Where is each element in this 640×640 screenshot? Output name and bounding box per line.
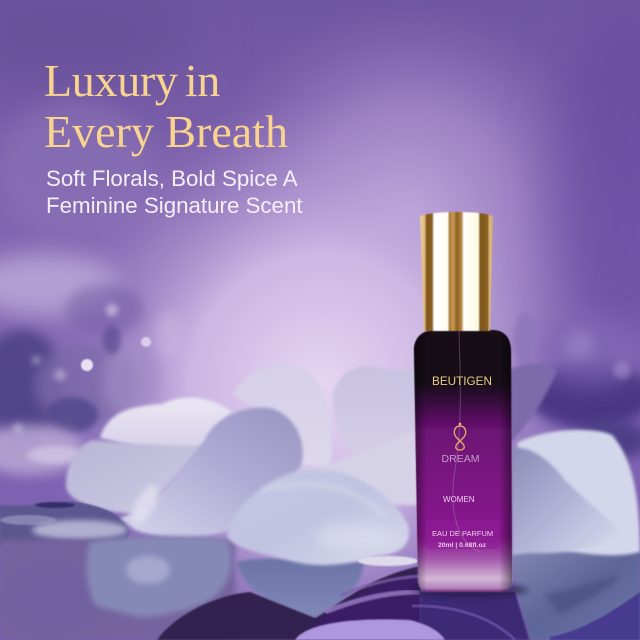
right blurred background <box>528 361 640 429</box>
subtitle: Feminine Signature Scent <box>46 192 303 218</box>
petal: back centre <box>233 364 332 467</box>
label: women: WOMEN <box>443 495 475 504</box>
perfume bottle <box>412 212 528 597</box>
petal: top left <box>100 398 232 452</box>
right petals <box>510 430 640 640</box>
inner glass panel <box>426 520 500 549</box>
logo mark <box>454 423 466 450</box>
petal: below centre <box>237 558 364 617</box>
title: Luxury in <box>44 55 220 106</box>
label: eau de parfum: EAU DE PARFUM <box>432 529 493 538</box>
bokeh lights <box>13 304 151 433</box>
petal: right inner <box>512 448 620 555</box>
subtitle: Soft Florals, Bold Spice A <box>46 166 298 191</box>
title <box>44 55 288 157</box>
petal: centre front <box>227 469 409 565</box>
petal: lower right of centre <box>300 428 420 505</box>
title: Every Breath <box>44 106 288 157</box>
petal: far left <box>66 440 205 515</box>
subtitle <box>46 166 303 218</box>
petal: right light <box>517 430 640 555</box>
gold cap <box>420 212 493 331</box>
bottle shadow <box>412 583 528 597</box>
right reflection <box>510 550 640 640</box>
petal: far back right <box>505 364 557 443</box>
petal: left centre <box>120 407 303 538</box>
petal reflection <box>87 536 232 617</box>
left lower water <box>0 540 235 640</box>
label: volume: 20ml | 0.68fl.oz <box>438 542 486 549</box>
dip tube <box>453 330 480 552</box>
petal: back right <box>333 366 420 470</box>
label: dream: DREAM <box>442 453 479 465</box>
dark swirl base <box>157 566 530 640</box>
highlight strip <box>358 556 418 566</box>
crystal petals <box>0 364 557 640</box>
bottle body <box>414 330 512 592</box>
left surface <box>0 502 130 548</box>
faint blurred petal, upper left <box>0 100 155 240</box>
bottle brand: BEUTIGEN <box>432 376 492 388</box>
